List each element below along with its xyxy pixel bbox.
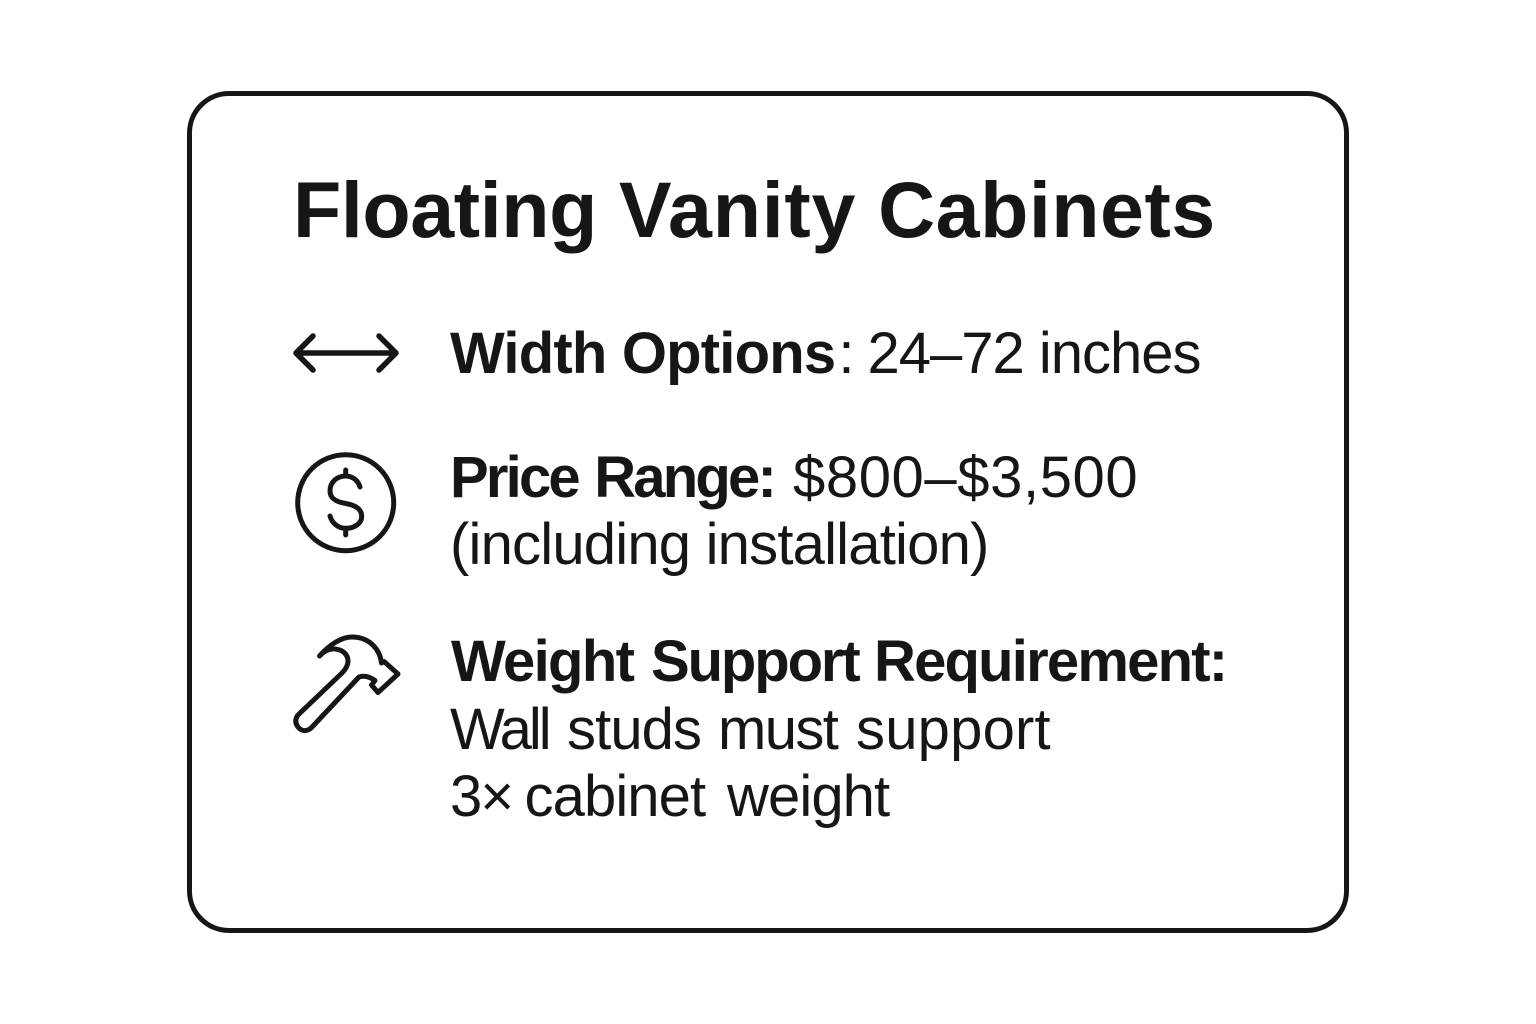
text: weight support heading: Requirement:: [874, 629, 1226, 694]
icon: width arrow: [293, 333, 399, 373]
title: [293, 165, 1216, 254]
text: cabinet weight: [450, 764, 890, 829]
text: width options: Width Options: [450, 321, 835, 386]
text: price range: Price Range:: [450, 445, 774, 510]
text: price note: (including installation): [450, 512, 989, 577]
panel: card: [187, 91, 1349, 933]
icon: dollar coin: [295, 452, 396, 554]
text: cabinet weight: 3×: [450, 764, 512, 829]
text: weight support heading: Support: [651, 629, 859, 694]
text: price range: [450, 445, 1138, 510]
text: cabinet weight: weight: [727, 764, 889, 829]
text: price range: $800–$3,500: [793, 445, 1138, 510]
title: Cabinets: [878, 165, 1216, 254]
text: cabinet weight: cabinet: [524, 764, 705, 829]
icon: hammer: [293, 634, 400, 734]
text: weight support heading: [451, 629, 1226, 694]
title: Floating: [293, 165, 597, 254]
text: width options: 24–72 inches: [867, 321, 1201, 386]
text: width options: [450, 321, 1201, 386]
text: weight support heading: Weight: [451, 629, 633, 694]
text: width options: :: [838, 321, 854, 386]
text: wall studs: support: [856, 697, 1051, 762]
text: wall studs: must: [718, 697, 837, 762]
text: wall studs: Wall: [450, 697, 549, 762]
text: wall studs: [450, 697, 1051, 762]
title: Vanity: [619, 165, 856, 254]
text: wall studs: studs: [567, 697, 701, 762]
